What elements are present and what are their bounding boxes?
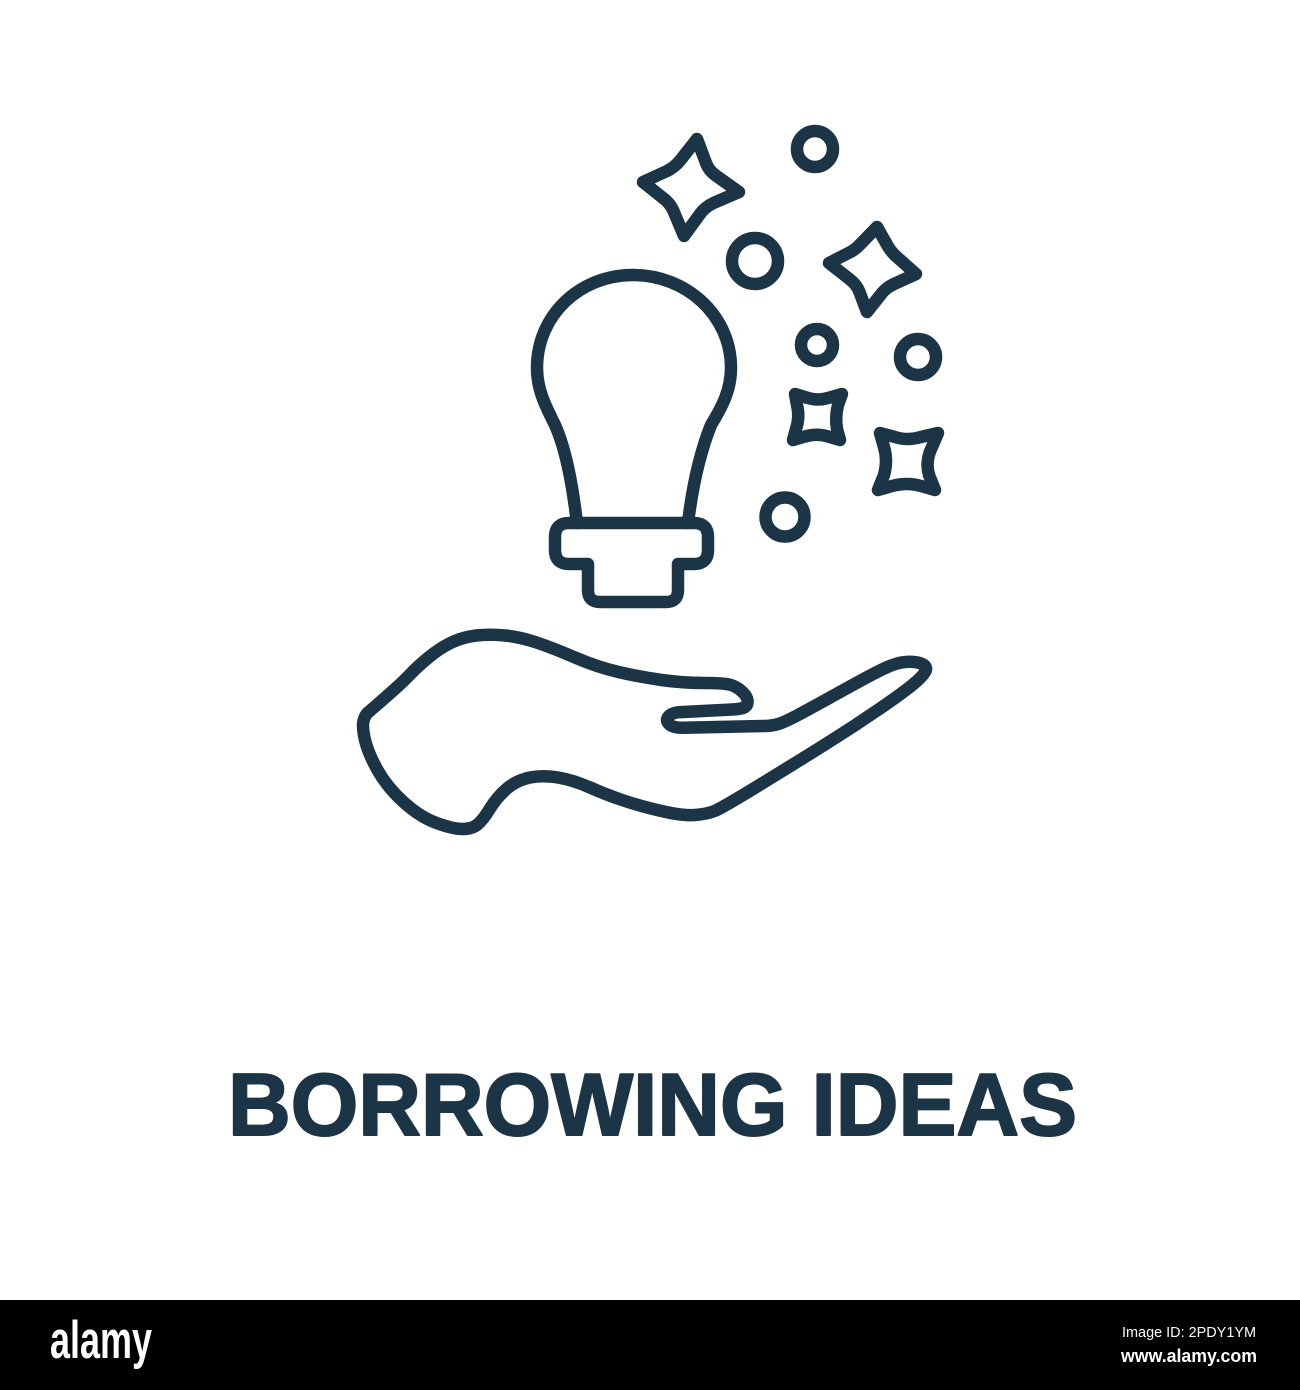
footer bar: [0, 1300, 1300, 1390]
icon: circle right: [900, 339, 936, 375]
icon: star middle right: [829, 227, 916, 312]
image id: Image ID: 2PDY1YM: [1122, 1324, 1256, 1341]
icon: borrowing ideas line icon: [363, 131, 938, 829]
icon: circle beside bulb: [732, 238, 778, 284]
icon: circle bottom: [766, 498, 804, 536]
icon: large square star: [878, 433, 938, 490]
icon: star top left: [643, 139, 739, 236]
website: www.alamy.com: [1120, 1346, 1257, 1366]
title: BORROWING IDEAS: [228, 1055, 1077, 1154]
icon: small square star: [793, 394, 842, 440]
icon: small circle: [801, 329, 833, 361]
icon: light bulb base: [555, 523, 708, 602]
icon: light bulb glass: [537, 275, 731, 523]
icon: circle top: [797, 131, 833, 167]
logo: alamy: alamy: [50, 1311, 152, 1370]
icon: open hand: [363, 635, 926, 829]
